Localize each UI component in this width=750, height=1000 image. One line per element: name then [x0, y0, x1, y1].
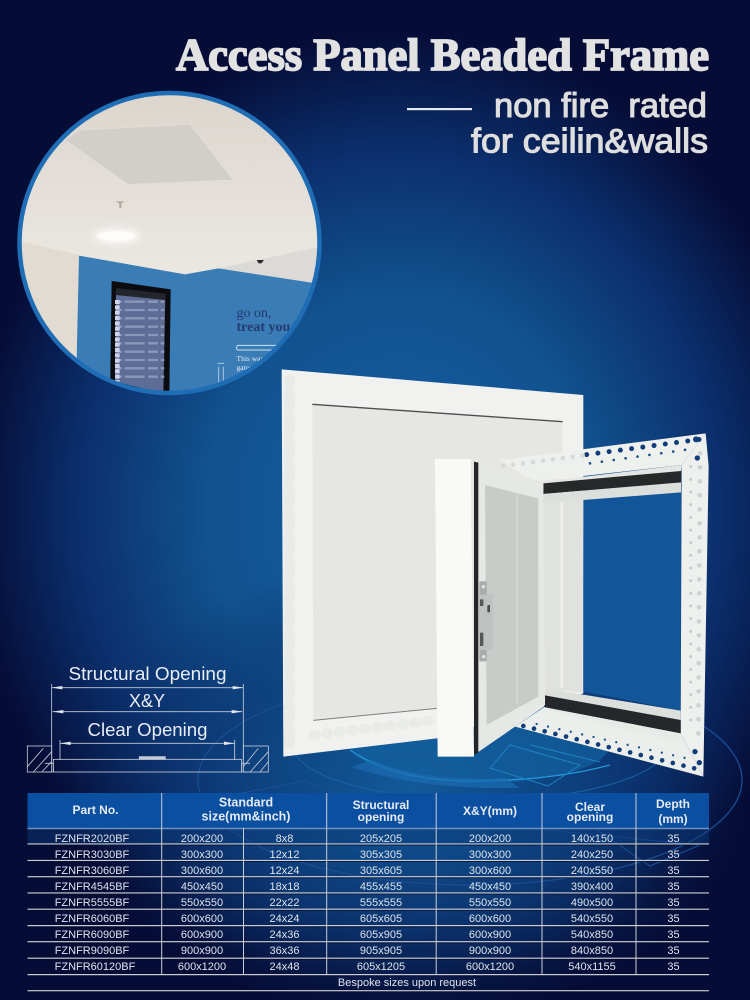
- circular ceiling photo: treat you: [236, 320, 290, 335]
- table row FZNFR4545BF: 455x455: [360, 881, 402, 893]
- table row FZNFR3060BF: FZNFR3060BF: [55, 865, 130, 877]
- table row FZNFR5555BF: FZNFR5555BF: [55, 897, 130, 909]
- table row FZNFR6090BF: 605x905: [360, 929, 402, 941]
- subtitle: for ceiling and walls: for ceilin&walls: [471, 122, 708, 160]
- circular ceiling photo: [15, 90, 325, 400]
- table row FZNFR3030BF: 35: [667, 849, 680, 861]
- table row FZNFR4545BF: 450x450: [469, 881, 511, 893]
- table row FZNFR6090BF: 600x900: [469, 929, 511, 941]
- table row FZNFR4545BF: 450x450: [181, 881, 223, 893]
- table row FZNFR4545BF: FZNFR4545BF: [55, 881, 130, 893]
- table row FZNFR6090BF: 540x850: [571, 929, 613, 941]
- table row FZNFR60120BF: 24x48: [270, 961, 299, 973]
- table header: Standard: [219, 796, 273, 810]
- table row FZNFR3060BF: [55, 865, 680, 877]
- table row FZNFR6090BF: [55, 929, 680, 941]
- table row FZNFR4545BF: 390x400: [571, 881, 613, 893]
- table row FZNFR6060BF: 605x605: [360, 913, 402, 925]
- table row FZNFR4545BF: 35: [667, 881, 680, 893]
- table rules: [28, 793, 709, 992]
- door leading edge: [435, 459, 474, 757]
- table row FZNFR9090BF: 905x905: [360, 945, 402, 957]
- table row FZNFR60120BF: [55, 961, 680, 973]
- table row FZNFR5555BF: 22x22: [270, 897, 299, 909]
- table header: [28, 793, 709, 828]
- table row FZNFR60120BF: 605x1205: [357, 961, 405, 973]
- table row FZNFR5555BF: [55, 897, 680, 909]
- product: access panel with beaded frame: [282, 369, 709, 777]
- table row FZNFR6060BF: 600x600: [469, 913, 511, 925]
- table header: size(mm&inch): [202, 810, 290, 824]
- table row FZNFR9090BF: 35: [667, 945, 680, 957]
- table row FZNFR6060BF: 24x24: [270, 913, 299, 925]
- table row FZNFR2020BF: 8x8: [276, 833, 293, 845]
- closed panel door: [289, 380, 563, 747]
- table row FZNFR9090BF: FZNFR9090BF: [55, 945, 130, 957]
- title: Access Panel Beaded Frame: [176, 30, 709, 80]
- dimension label: clear opening: Clear Opening: [88, 720, 208, 740]
- table row FZNFR60120BF: 600x1200: [178, 961, 226, 973]
- closed panel frame: [282, 369, 583, 757]
- table row FZNFR9090BF: 36x36: [270, 945, 299, 957]
- table row FZNFR2020BF: [55, 833, 680, 845]
- frame inner channel with dark gaskets: [542, 465, 682, 743]
- tech circle motif in background: [198, 675, 742, 885]
- blue window through open frame: [583, 492, 681, 711]
- table row FZNFR2020BF: 200x200: [181, 833, 223, 845]
- table row FZNFR3060BF: 12x24: [270, 865, 299, 877]
- table row FZNFR6090BF: 24x36: [270, 929, 299, 941]
- table row FZNFR5555BF: 550x550: [181, 897, 223, 909]
- circular ceiling photo: go on,: [236, 306, 272, 321]
- table row FZNFR5555BF: 555x555: [360, 897, 402, 909]
- table row FZNFR3060BF: 240x550: [571, 865, 613, 877]
- table row FZNFR6060BF: FZNFR6060BF: [55, 913, 130, 925]
- table row FZNFR3030BF: [55, 849, 680, 861]
- table row FZNFR3060BF: 300x600: [181, 865, 223, 877]
- open door inner face: [474, 462, 544, 755]
- specification table: [28, 793, 709, 992]
- table row FZNFR5555BF: 35: [667, 897, 680, 909]
- table row FZNFR60120BF: 600x1200: [466, 961, 514, 973]
- door latch: [479, 581, 493, 661]
- table row FZNFR2020BF: 140x150: [571, 833, 613, 845]
- table row FZNFR5555BF: 550x550: [469, 897, 511, 909]
- table row FZNFR9090BF: 900x900: [181, 945, 223, 957]
- dimension diagram: [27, 664, 268, 772]
- table row FZNFR6090BF: 35: [667, 929, 680, 941]
- table header: (mm): [658, 812, 688, 826]
- table row FZNFR60120BF: 35: [667, 961, 680, 973]
- table row FZNFR6060BF: 35: [667, 913, 680, 925]
- circular ceiling photo: This way: [236, 354, 264, 363]
- table header: Clear: [575, 800, 605, 814]
- table row FZNFR4545BF: 18x18: [270, 881, 299, 893]
- table row FZNFR9090BF: 840x850: [571, 945, 613, 957]
- dimension lines and section drawing: [27, 684, 268, 772]
- subtitle: non fire rated: non fire rated: [494, 87, 707, 125]
- table row FZNFR9090BF: 900x900: [469, 945, 511, 957]
- table row FZNFR6060BF: 600x600: [181, 913, 223, 925]
- table header: X&Y(mm): [463, 804, 517, 818]
- table header: Structural: [353, 798, 409, 812]
- table row FZNFR3030BF: 240x250: [571, 849, 613, 861]
- table row FZNFR3030BF: 300x300: [181, 849, 223, 861]
- table row FZNFR6090BF: FZNFR6090BF: [55, 929, 130, 941]
- table row FZNFR9090BF: [55, 945, 680, 957]
- table row FZNFR2020BF: 205x205: [360, 833, 402, 845]
- table row FZNFR3030BF: FZNFR3030BF: [55, 849, 130, 861]
- dimension label: structural opening: Structural Opening: [68, 664, 226, 684]
- table row FZNFR2020BF: 35: [667, 833, 680, 845]
- circular ceiling photo: gates: [236, 363, 252, 372]
- table header: opening: [567, 810, 613, 824]
- table row FZNFR3060BF: 35: [667, 865, 680, 877]
- table row FZNFR2020BF: 200x200: [469, 833, 511, 845]
- table row FZNFR6060BF: 540x550: [571, 913, 613, 925]
- table row FZNFR3030BF: 300x300: [469, 849, 511, 861]
- table header: Part No.: [72, 803, 119, 817]
- table footnote: Bespoke sizes upon request: [338, 977, 476, 989]
- table row FZNFR6060BF: [55, 913, 680, 925]
- table row FZNFR3030BF: 305x305: [360, 849, 402, 861]
- table row FZNFR6090BF: 600x900: [181, 929, 223, 941]
- table row FZNFR60120BF: FZNFR60120BF: [55, 961, 136, 973]
- table header: Depth: [656, 797, 690, 811]
- open frame beaded flange: [500, 433, 709, 777]
- table row FZNFR3060BF: 300x600: [469, 865, 511, 877]
- table row FZNFR3060BF: 305x605: [360, 865, 402, 877]
- table row FZNFR60120BF: 540x1155: [568, 961, 616, 973]
- table row FZNFR3030BF: 12x12: [270, 849, 299, 861]
- dimension label: X&Y: X&Y: [129, 691, 165, 711]
- table row FZNFR4545BF: [55, 881, 680, 893]
- table row FZNFR5555BF: 490x500: [571, 897, 613, 909]
- table row FZNFR2020BF: FZNFR2020BF: [55, 833, 130, 845]
- table header: opening: [358, 810, 404, 824]
